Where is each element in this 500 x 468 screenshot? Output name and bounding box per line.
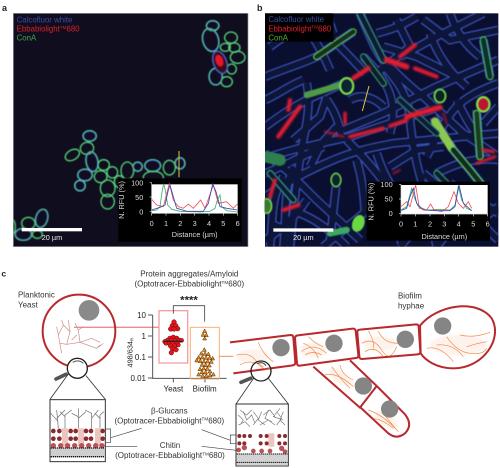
significance bracket: **** bbox=[180, 295, 198, 307]
line plot inset a: 2 bbox=[178, 219, 182, 228]
yellow line b bbox=[362, 86, 369, 111]
line plot inset b: 1 bbox=[413, 220, 417, 229]
legend b bbox=[265, 13, 333, 42]
label: beta glucans: 680) bbox=[208, 416, 225, 425]
label: planktonic yeast: Planktonic bbox=[18, 291, 55, 300]
panel label c: c bbox=[1, 269, 6, 279]
legend a bbox=[17, 16, 80, 43]
legend b: Calcofluor white bbox=[268, 15, 324, 24]
scatter chart axes: Biofilm bbox=[193, 385, 217, 394]
line plot inset a: 6 bbox=[236, 219, 240, 228]
biofilm connector line bbox=[219, 355, 233, 358]
line plot inset b: 6 bbox=[486, 220, 490, 229]
scatter chart axes: Yeast bbox=[163, 385, 184, 394]
biofilm highlight box bbox=[190, 327, 219, 379]
legend b: TM bbox=[311, 25, 318, 30]
legend a: Calcofluor white bbox=[17, 16, 72, 25]
scale bar a: 20 µm bbox=[42, 233, 62, 242]
line plot inset b: 3 bbox=[442, 220, 446, 229]
label: beta glucans: (Optotracer-Ebbabiolight bbox=[114, 416, 225, 425]
line plot inset b: 5 bbox=[471, 220, 475, 229]
chart title: 680) bbox=[228, 280, 245, 289]
yellow line a bbox=[177, 151, 180, 177]
red protein aggregate signal bbox=[270, 45, 495, 210]
scatter chart axes: 10 bbox=[137, 311, 147, 320]
chart title: Protein aggregates/Amyloid bbox=[140, 270, 238, 279]
label: beta glucans: β-Glucans bbox=[151, 406, 188, 415]
line plot inset a: 5 bbox=[221, 219, 225, 228]
panel label b: b bbox=[257, 3, 263, 13]
line plot inset a: N. RFU (%) bbox=[117, 181, 126, 219]
pink branched fibrils bbox=[57, 320, 103, 353]
magnifier biofilm bbox=[251, 361, 271, 381]
yeast data points bbox=[163, 320, 184, 355]
panel label a: a bbox=[2, 3, 8, 13]
hyphae network bbox=[262, 13, 498, 247]
nuclei bbox=[272, 317, 451, 418]
cell wall inset biofilm bbox=[236, 378, 288, 466]
line plot inset b bbox=[367, 180, 490, 241]
line plot inset b: 50 bbox=[385, 195, 393, 204]
line plot inset b: 2 bbox=[428, 220, 432, 229]
bulb cells bbox=[262, 78, 490, 234]
scatter chart axes: 1 bbox=[142, 332, 147, 341]
chart title: TM bbox=[221, 280, 228, 285]
legend a: 680 bbox=[66, 25, 80, 34]
label: planktonic yeast: Yeast bbox=[18, 301, 38, 310]
line plot inset a: 1 bbox=[164, 219, 168, 228]
yeast connector line bbox=[74, 325, 159, 329]
label: chitin: Chitin bbox=[160, 441, 180, 450]
hypha branch cells bbox=[230, 306, 495, 437]
yeast cell bbox=[43, 295, 115, 367]
label: biofilm hyphae: Biofilm bbox=[398, 291, 422, 300]
label: beta glucans: TM bbox=[201, 417, 208, 422]
label: chitin: TM bbox=[202, 451, 209, 456]
magnifier handle biofilm bbox=[241, 378, 251, 382]
label: chitin: (Optotracer-Ebbabiolight bbox=[115, 451, 225, 460]
line plot inset b: 0 bbox=[399, 220, 403, 229]
panel c: schematic and chart bbox=[1, 269, 288, 466]
orange fibrils bbox=[237, 331, 490, 432]
scale bar b: 20 µm bbox=[293, 233, 314, 242]
panel: biofilm hyphae micrograph bbox=[262, 13, 498, 247]
yeast cells bbox=[10, 21, 245, 240]
line plot inset a bbox=[117, 178, 242, 242]
legend b: Ebbabiolight bbox=[268, 24, 311, 33]
legend a: TM bbox=[60, 25, 67, 30]
line plot inset a: 4 bbox=[207, 219, 211, 228]
line plot inset a: 0 bbox=[150, 219, 154, 228]
scale bar a bbox=[22, 228, 82, 242]
label: chitin: 680) bbox=[209, 451, 225, 460]
scatter chart axes bbox=[125, 311, 227, 394]
line plot inset b: Distance (µm) bbox=[421, 232, 467, 241]
callout box and lines yeast bbox=[105, 428, 142, 446]
line plot inset a: 3 bbox=[193, 219, 197, 228]
biofilm data points bbox=[195, 329, 215, 378]
line plot inset b: 100 bbox=[380, 180, 393, 189]
line plot inset b: N. RFU (%) bbox=[367, 183, 376, 221]
legend b: ConA bbox=[268, 33, 289, 42]
line plot inset b: 4 bbox=[457, 220, 461, 229]
legend a: Ebbabiolight bbox=[17, 25, 60, 34]
yeast highlight box bbox=[159, 311, 188, 363]
yeast median line bbox=[163, 340, 183, 343]
callout box and lines biofilm bbox=[202, 430, 236, 450]
scatter chart axes: 0.01 bbox=[130, 374, 147, 383]
line plot inset a: 50 bbox=[135, 193, 143, 202]
magnifier yeast bbox=[50, 358, 105, 399]
significance bracket bbox=[173, 295, 205, 322]
line plot inset a: 100 bbox=[131, 178, 143, 187]
scatter chart axes: 498/634 bbox=[125, 341, 134, 367]
line plot inset b: 0 bbox=[389, 209, 393, 218]
scale bar b bbox=[273, 228, 333, 242]
line plot inset a: Distance (µm) bbox=[172, 230, 218, 239]
label: biofilm hyphae: hyphae bbox=[398, 301, 425, 310]
legend a: ConA bbox=[17, 34, 37, 43]
biofilm hypha schematic bbox=[230, 291, 495, 437]
legend b: 680 bbox=[318, 24, 332, 33]
cell wall inset yeast bbox=[50, 400, 105, 462]
scatter chart axes: R bbox=[130, 338, 135, 341]
fibril glow bbox=[237, 335, 487, 433]
line plot inset a: 0 bbox=[139, 207, 143, 216]
panel: yeast micrograph bbox=[10, 13, 248, 247]
chart title: (Optotracer-Ebbabiolight bbox=[134, 280, 245, 289]
scatter chart axes: 0.1 bbox=[135, 353, 147, 362]
